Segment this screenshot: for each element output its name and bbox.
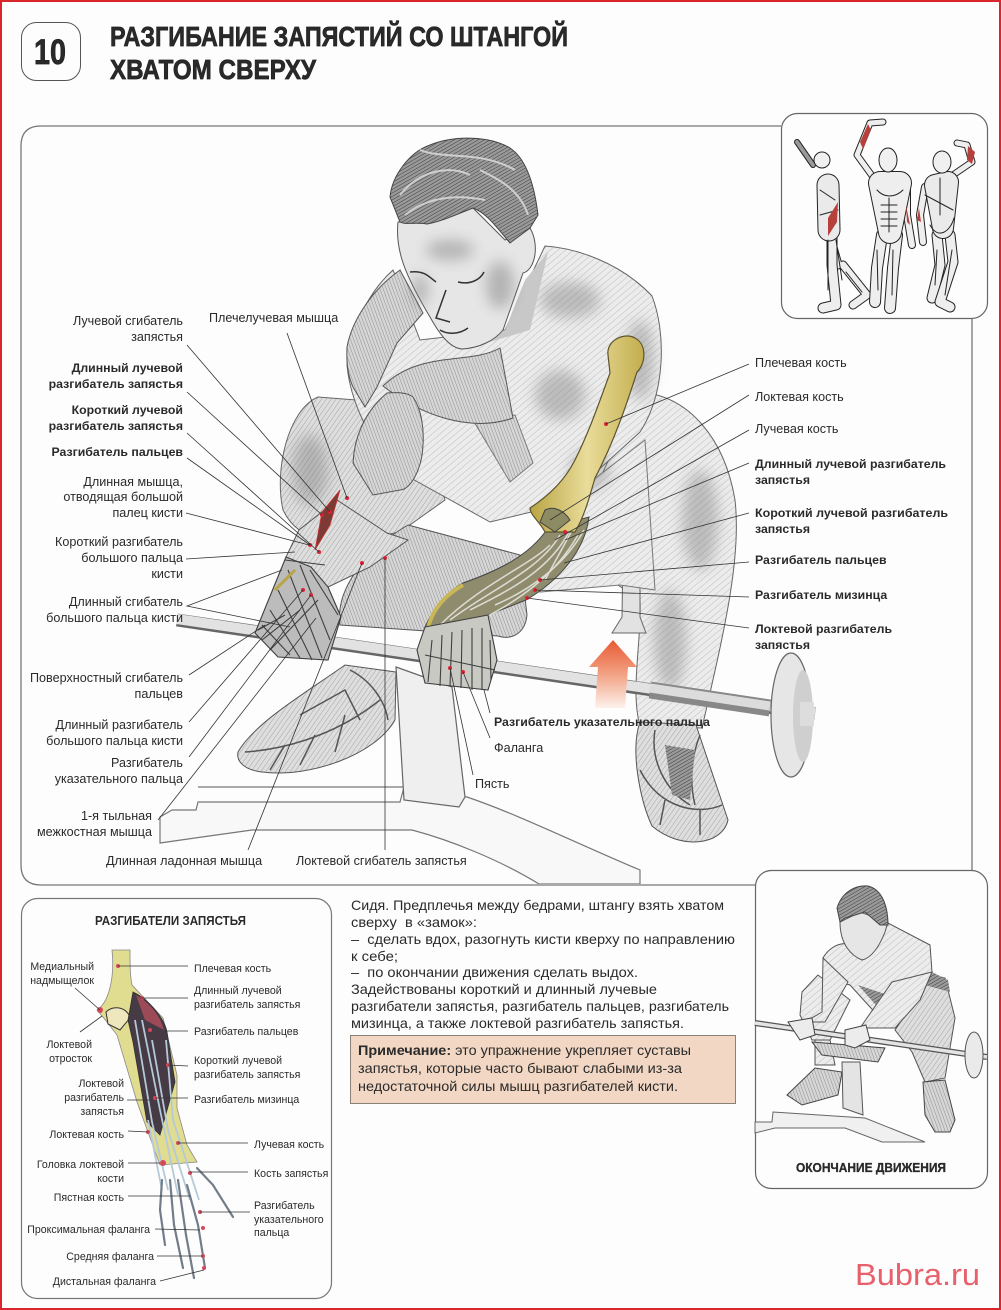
elbow joint — [106, 1008, 130, 1030]
label: Длинный разгибатель большого пальца кисти: Длинный разгибатель — [56, 718, 183, 732]
figure: back view — [917, 143, 975, 307]
soft shading on torso and legs — [292, 282, 718, 690]
label: Локтевая кость: Локтевая кость — [755, 390, 844, 404]
panel: wrist extensors anatomy — [22, 898, 332, 1298]
elbow detail — [540, 508, 570, 532]
label: Длинный разгибатель большого пальца кисти — [46, 590, 303, 748]
small hair — [837, 886, 888, 925]
label: Длинный лучевой разгибатель запястья: Длинный лучевой — [72, 361, 183, 375]
facial features — [410, 272, 484, 333]
bench base — [160, 787, 640, 884]
label: Длинная мышца, отводящая большой палец кисти: отводящая большой — [63, 490, 183, 504]
label: Плечелучевая мышца — [209, 311, 347, 498]
label: Разгибатель пальцев (right) — [540, 553, 887, 580]
movement arrow — [589, 640, 637, 708]
arm labels: кости — [97, 1173, 124, 1185]
small left thigh — [800, 975, 850, 1040]
label: Локтевая кость — [550, 390, 844, 520]
label: 1-я тыльная межкостная мышца: 1-я тыльная — [81, 809, 152, 823]
title: РАЗГИБАНИЕ ЗАПЯСТИЙ СО ШТАНГОЙ — [110, 20, 568, 52]
left shoe — [238, 665, 396, 773]
label: Разгибатель мизинца — [535, 588, 887, 602]
label: Короткий лучевой разгибатель запястья — [49, 403, 319, 552]
neck shadow — [488, 252, 548, 343]
label: Лучевая кость — [555, 422, 839, 540]
face — [397, 208, 535, 349]
label: Поверхностный сгибатель пальцев: Поверхностный сгибатель — [30, 671, 183, 685]
arm labels: надмыщелок — [30, 975, 94, 987]
label: Длинная мышца, отводящая большой палец кисти: палец кисти — [112, 506, 183, 520]
number badge: 10 — [34, 33, 66, 72]
small pad — [812, 1042, 885, 1062]
callout: note: недостаточной силы мышц разгибателей кисти. — [358, 1078, 678, 1094]
small bench — [755, 1112, 925, 1142]
humerus and elbow bones — [530, 336, 644, 532]
label: Пясть: Пясть — [475, 777, 510, 791]
right shoe — [636, 722, 728, 842]
label: Локтевой разгибатель запястья (right): запястья — [755, 638, 810, 652]
label: Длинная ладонная мышца — [106, 563, 362, 868]
tendons — [135, 1020, 199, 1200]
callout: note: запястья, которые часто бывают слабыми из-за — [358, 1060, 682, 1076]
label: Разгибатель пальцев (right): Разгибатель пальцев — [755, 553, 887, 567]
small face — [840, 912, 888, 960]
label: Длинный лучевой разгибатель запястья — [49, 361, 322, 515]
arm labels: разгибатель запястья — [194, 1069, 300, 1081]
arm labels: Плечевая кость — [194, 963, 272, 975]
face shading — [412, 240, 514, 309]
arm labels: Медиальный — [30, 961, 94, 973]
number badge — [22, 22, 80, 80]
panel heading: РАЗГИБАТЕЛИ ЗАПЯСТЬЯ — [95, 914, 246, 928]
label: Короткий лучевой разгибатель запястья (right) — [564, 506, 948, 563]
small bench post — [842, 1062, 863, 1115]
figure: side view — [797, 142, 867, 308]
red attachment points — [97, 964, 206, 1270]
arm labels: Локтевой — [46, 1039, 92, 1051]
label: Разгибатель пальцев: Разгибатель пальцев — [51, 445, 183, 459]
watermark: Bubra.ru — [855, 1257, 980, 1292]
label: Лучевой сгибатель запястья: запястья — [131, 330, 183, 344]
instructions text block: Сидя. Предплечья между бедрами, штангу взять хватом — [351, 897, 724, 913]
label: Фаланга — [463, 672, 543, 755]
instructions text block: – сделать вдох, разогнуть кисти кверху по направлению — [351, 931, 735, 947]
label: Поверхностный сгибатель пальцев: пальцев — [134, 687, 183, 701]
bench post — [396, 667, 465, 807]
small right shoe — [923, 1080, 955, 1132]
panel: muscle figures inset — [782, 114, 988, 318]
left forearm extensors in red — [315, 490, 340, 550]
label: Плечевая кость — [606, 356, 847, 424]
left thigh — [280, 397, 445, 540]
arm labels: отросток — [49, 1053, 92, 1065]
arm labels: Проксимальная фаланга — [27, 1224, 150, 1236]
label: Длинный разгибатель большого пальца кисти: большого пальца кисти — [46, 734, 183, 748]
instructions text block: – по окончании движения сделать выдох. — [351, 964, 638, 980]
instructions text block: мизинца, а также локтевой разгибатель запястья. — [351, 1015, 684, 1031]
label: Короткий лучевой разгибатель запястья (right): Короткий лучевой разгибатель — [755, 506, 948, 520]
label: Короткий разгибатель большого пальца кисти: большого пальца — [81, 551, 183, 565]
label: Короткий лучевой разгибатель запястья: Короткий лучевой — [72, 403, 183, 417]
right forearm tendons and bones — [425, 517, 589, 640]
label: Разгибатель указательного пальца (hand): Разгибатель указательного пальца — [494, 715, 710, 729]
small shorts — [925, 972, 950, 992]
hair — [390, 138, 538, 243]
small belly shadow — [858, 985, 888, 1012]
title — [110, 20, 568, 85]
small left shoe — [787, 1068, 842, 1105]
arm labels: Средняя фаланга — [66, 1251, 154, 1263]
right leg — [590, 392, 736, 728]
label: Локтевой сгибатель запястья: Локтевой сгибатель запястья — [296, 854, 467, 868]
instructions text block — [351, 897, 735, 1031]
arm labels: Дистальная фаланга — [53, 1276, 156, 1288]
seat support — [611, 586, 647, 634]
arm labels: Локтевой — [78, 1078, 124, 1090]
arm labels: Локтевая кость — [49, 1129, 124, 1141]
small right leg — [895, 975, 955, 1082]
callout: note: Примечание: это упражнение укрепляет суставы — [358, 1042, 691, 1058]
label: Короткий разгибатель большого пальца кисти: Короткий разгибатель — [55, 535, 183, 549]
label: Пясть — [450, 668, 510, 791]
arm labels: запястья — [80, 1106, 124, 1118]
figure: front view — [857, 122, 912, 308]
callout: note — [350, 1036, 736, 1104]
label: 1-я тыльная межкостная мышца: межкостная мышца — [37, 825, 152, 839]
right hand — [417, 615, 497, 690]
label: Разгибатель пальцев — [51, 445, 310, 545]
label: Лучевой сгибатель запястья — [73, 314, 330, 512]
label: Локтевой разгибатель запястья (right): Локтевой разгибатель — [755, 622, 892, 636]
arm labels: Лучевая кость — [254, 1139, 325, 1151]
small illustration: end position — [755, 886, 987, 1142]
label: Разгибатель указательного пальца — [55, 595, 311, 786]
barbell — [177, 619, 815, 777]
arm labels: Разгибатель пальцев — [194, 1026, 299, 1038]
label: Разгибатель мизинца: Разгибатель мизинца — [755, 588, 887, 602]
label: Фаланга: Фаланга — [494, 741, 543, 755]
arm labels: Пястная кость — [54, 1192, 124, 1204]
upper arm muscle — [353, 393, 423, 495]
small barbell — [755, 1023, 987, 1078]
instructions text block: сверху в «замок»: — [351, 914, 477, 930]
left hand tendons — [255, 557, 341, 660]
small left lower leg — [815, 1040, 835, 1065]
label: Поверхностный сгибатель пальцев — [30, 625, 265, 701]
panel caption: ОКОНЧАНИЕ ДВИЖЕНИЯ — [796, 1160, 946, 1175]
label: Длинный лучевой разгибатель запястья (right): Длинный лучевой разгибатель — [755, 457, 946, 471]
label: Короткий разгибатель большого пальца кисти — [55, 535, 295, 581]
lower abdomen stripes — [473, 415, 533, 482]
deltoid muscle — [347, 270, 423, 407]
instructions text block: к себе; — [351, 948, 398, 964]
label: Разгибатель указательного пальца (hand) — [484, 690, 710, 729]
forearm muscles — [128, 992, 175, 1135]
hand bones — [160, 1168, 233, 1278]
arm labels: пальца — [254, 1227, 289, 1239]
arm illustration — [97, 950, 233, 1278]
label: Короткий разгибатель большого пальца кисти: кисти — [151, 567, 183, 581]
main panel frame — [21, 126, 972, 885]
label: Длинный лучевой разгибатель запястья (right): запястья — [755, 473, 810, 487]
pectoral muscle fan — [383, 348, 513, 423]
left forearm — [286, 500, 409, 616]
red attachment points — [301, 422, 608, 674]
arm labels: Разгибатель мизинца — [194, 1094, 299, 1106]
label: Длинный лучевой разгибатель запястья: разгибатель запястья — [49, 377, 183, 391]
instructions text block: Задействованы короткий и длинный лучевые — [351, 981, 657, 997]
label: Длинная ладонная мышца: Длинная ладонная мышца — [106, 854, 262, 868]
label: Плечелучевая мышца: Плечелучевая мышца — [209, 311, 338, 325]
label: Длинный сгибатель большого пальца кисти: большого пальца кисти — [46, 611, 183, 625]
arm labels: Разгибатель — [254, 1200, 315, 1212]
label: Длинный лучевой разгибатель запястья (right) — [565, 457, 946, 540]
label: Длинный сгибатель большого пальца кисти — [46, 570, 290, 627]
label: Лучевая кость: Лучевая кость — [755, 422, 839, 436]
arm labels: указательного — [254, 1214, 324, 1226]
label: Локтевой разгибатель запястья (right) — [527, 598, 892, 652]
instructions text block: разгибатели запястья, разгибатель пальцев, разгибатель — [351, 998, 729, 1014]
arm labels: Кость запястья — [254, 1168, 328, 1180]
label: Короткий лучевой разгибатель запястья (right): запястья — [755, 522, 810, 536]
arm labels: Короткий лучевой — [194, 1055, 282, 1067]
small torso — [823, 923, 932, 1018]
arm labels: разгибатель — [64, 1092, 124, 1104]
label: Лучевой сгибатель запястья: Лучевой сгибатель — [73, 314, 183, 328]
label: Разгибатель указательного пальца: Разгибатель — [111, 756, 183, 770]
torso — [347, 246, 661, 522]
panel: end of movement — [755, 870, 988, 1188]
label: 1-я тыльная межкостная мышца — [37, 618, 316, 839]
main illustration: seated wrist extension — [160, 138, 815, 884]
label: Длинный сгибатель большого пальца кисти: Длинный сгибатель — [69, 595, 183, 609]
arm labels — [27, 961, 328, 1288]
red muscle bellies — [136, 995, 164, 1030]
label: Короткий лучевой разгибатель запястья: разгибатель запястья — [49, 419, 183, 433]
arm labels: разгибатель запястья — [194, 999, 300, 1011]
small hands — [788, 1018, 870, 1048]
right inner thigh — [540, 440, 655, 592]
title: ХВАТОМ СВЕРХУ — [110, 54, 317, 85]
label: Разгибатель указательного пальца: указательного пальца — [55, 772, 183, 786]
bench pad — [339, 525, 527, 637]
small arms — [805, 958, 932, 1028]
label: Плечевая кость: Плечевая кость — [755, 356, 847, 370]
arm labels: Головка локтевой — [37, 1159, 124, 1171]
arm outline and bones — [97, 950, 197, 1165]
label: Длинная мышца, отводящая большой палец кисти — [63, 475, 309, 545]
label: Длинная мышца, отводящая большой палец кисти: Длинная мышца, — [83, 475, 183, 489]
arm labels: Длинный лучевой — [194, 985, 282, 997]
